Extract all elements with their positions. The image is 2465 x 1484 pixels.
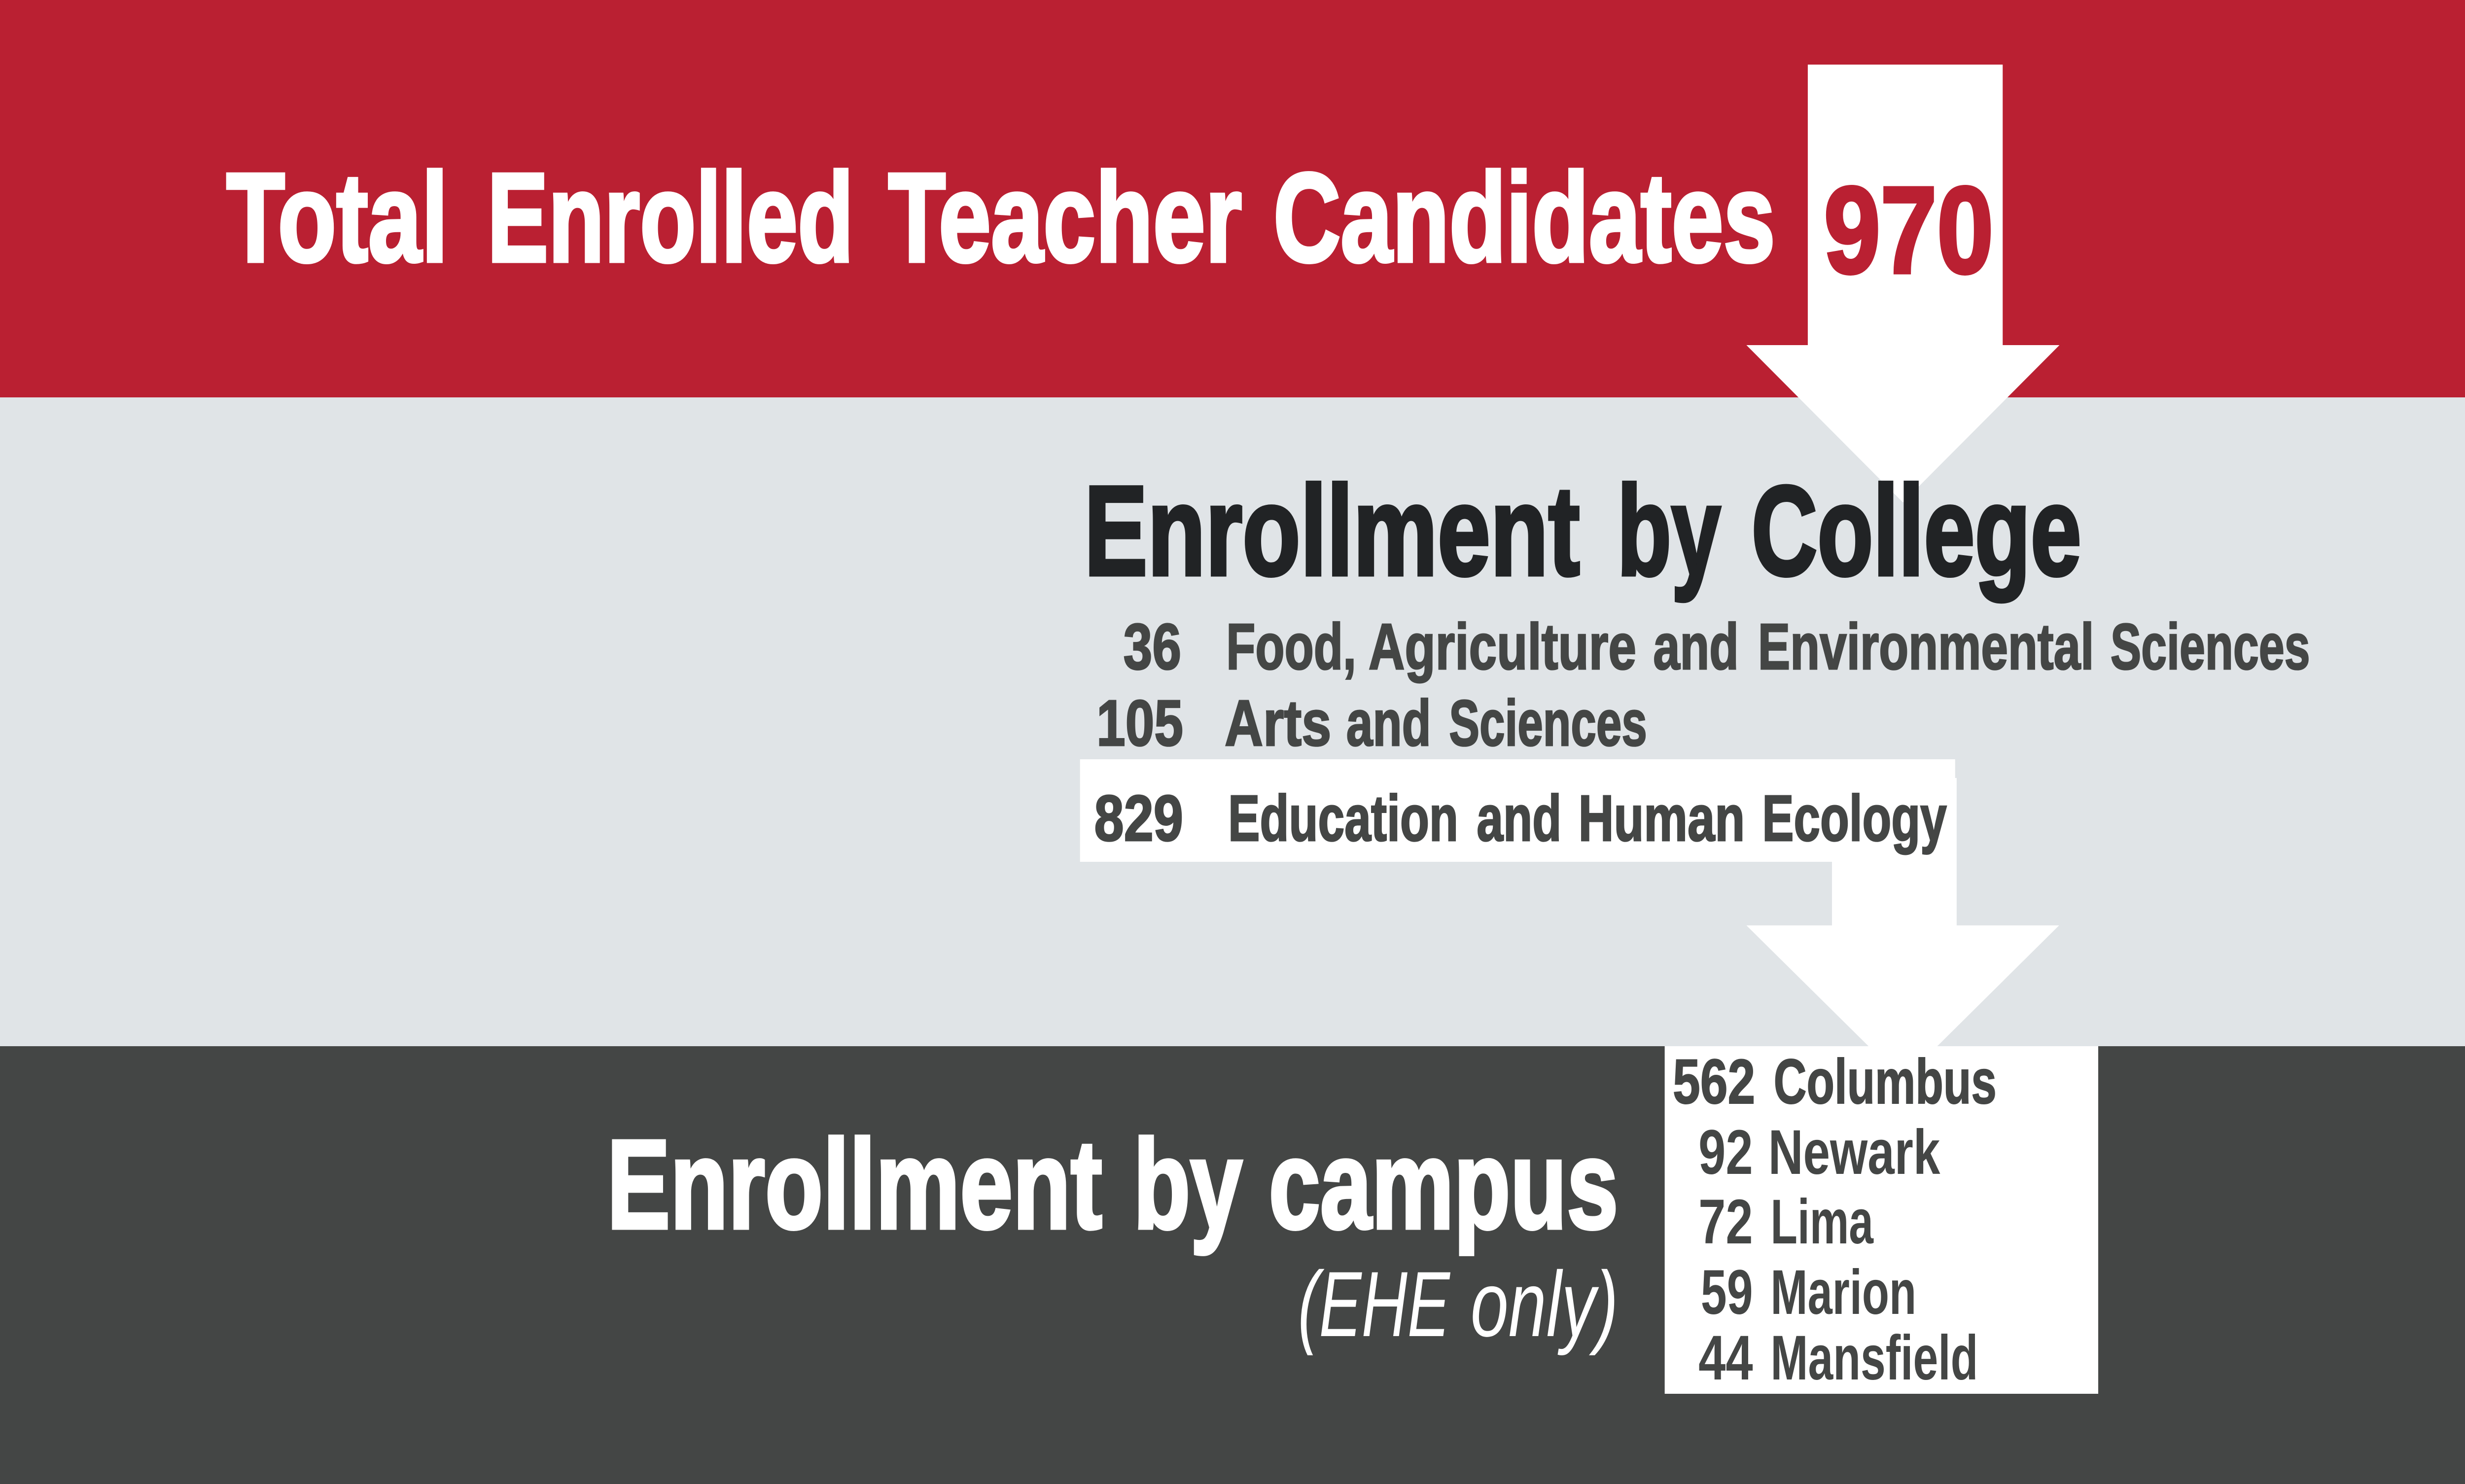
subheading: EHE only <box>1298 1252 1618 1356</box>
subheading: EHE only: (EHE <box>1298 1252 1450 1356</box>
row: Lima <box>1698 1187 1874 1257</box>
panel: enrollment by campus band (dark gray) <box>0 1046 2465 1484</box>
heading: enrollment by campus: Enrollment <box>607 1114 1102 1255</box>
row: food, agriculture and environmental sciences: 36 <box>1124 611 1181 683</box>
number: total 970: 970 <box>1824 162 1994 299</box>
row: arts and sciences: and <box>1346 687 1431 760</box>
panel: enrollment by college band (light gray) <box>0 397 2465 1046</box>
row: education and human ecology: and <box>1477 782 1561 855</box>
row: education and human ecology: Education <box>1228 782 1458 855</box>
row: food, agriculture and environmental sciences: Agriculture <box>1369 611 1636 683</box>
row: Newark: Newark <box>1768 1117 1940 1188</box>
row: Mansfield <box>1698 1323 1978 1393</box>
heading: enrollment by college: by <box>1617 460 1721 602</box>
row: Marion: Marion <box>1770 1257 1916 1328</box>
row: arts and sciences: Sciences <box>1449 687 1647 760</box>
row: Marion: 59 <box>1701 1257 1753 1328</box>
subheading: EHE only: only) <box>1471 1252 1618 1356</box>
heading: enrollment by campus: campus <box>1269 1114 1618 1255</box>
heading: total enrolled teacher candidates: Candidates <box>1273 147 1775 288</box>
row: food, agriculture and environmental sciences: Sciences <box>2111 611 2310 683</box>
heading: enrollment by campus: by <box>1133 1114 1242 1255</box>
heading: enrollment by college: Enrollment <box>1084 460 1580 602</box>
row: food, agriculture and environmental sciences <box>1124 611 2310 683</box>
heading: total enrolled teacher candidates: Teacher <box>888 147 1242 288</box>
heading: total enrolled teacher candidates: Total <box>226 147 448 288</box>
panel: campus list box <box>1665 1046 2098 1394</box>
row: Lima: Lima <box>1770 1187 1874 1257</box>
arrow: from total to college <box>1746 65 2059 502</box>
row: Columbus <box>1673 1047 1997 1117</box>
heading: enrollment by college: College <box>1752 460 2081 602</box>
row: Marion <box>1701 1257 1916 1328</box>
row: food, agriculture and environmental sciences: and <box>1653 611 1739 683</box>
heading: enrollment by campus <box>607 1114 1618 1255</box>
heading: total enrolled teacher candidates <box>226 147 1775 288</box>
arrow: white highlight box from education row to campus list <box>1080 759 2059 1080</box>
row: education and human ecology <box>1094 782 1947 855</box>
row: food, agriculture and environmental sciences: Food, <box>1226 611 1356 683</box>
row: education and human ecology: Ecology <box>1762 782 1947 855</box>
row: Newark: 92 <box>1698 1117 1753 1188</box>
heading: total enrolled teacher candidates: Enrolled <box>487 147 854 288</box>
row: Columbus: 562 <box>1673 1047 1755 1117</box>
heading: enrollment by college <box>1084 460 2081 602</box>
row: Lima: 72 <box>1698 1187 1753 1257</box>
row: arts and sciences: Arts <box>1225 687 1331 760</box>
row: arts and sciences: 105 <box>1096 687 1183 760</box>
panel: total band (red) <box>0 0 2465 397</box>
row: Mansfield: Mansfield <box>1770 1323 1978 1393</box>
row: education and human ecology: 829 <box>1094 782 1183 855</box>
row: education and human ecology: Human <box>1579 782 1745 855</box>
row: Columbus: Columbus <box>1774 1047 1997 1117</box>
row: food, agriculture and environmental sciences: Environmental <box>1758 611 2094 683</box>
row: arts and sciences <box>1096 687 1647 760</box>
row: Mansfield: 44 <box>1698 1323 1753 1393</box>
